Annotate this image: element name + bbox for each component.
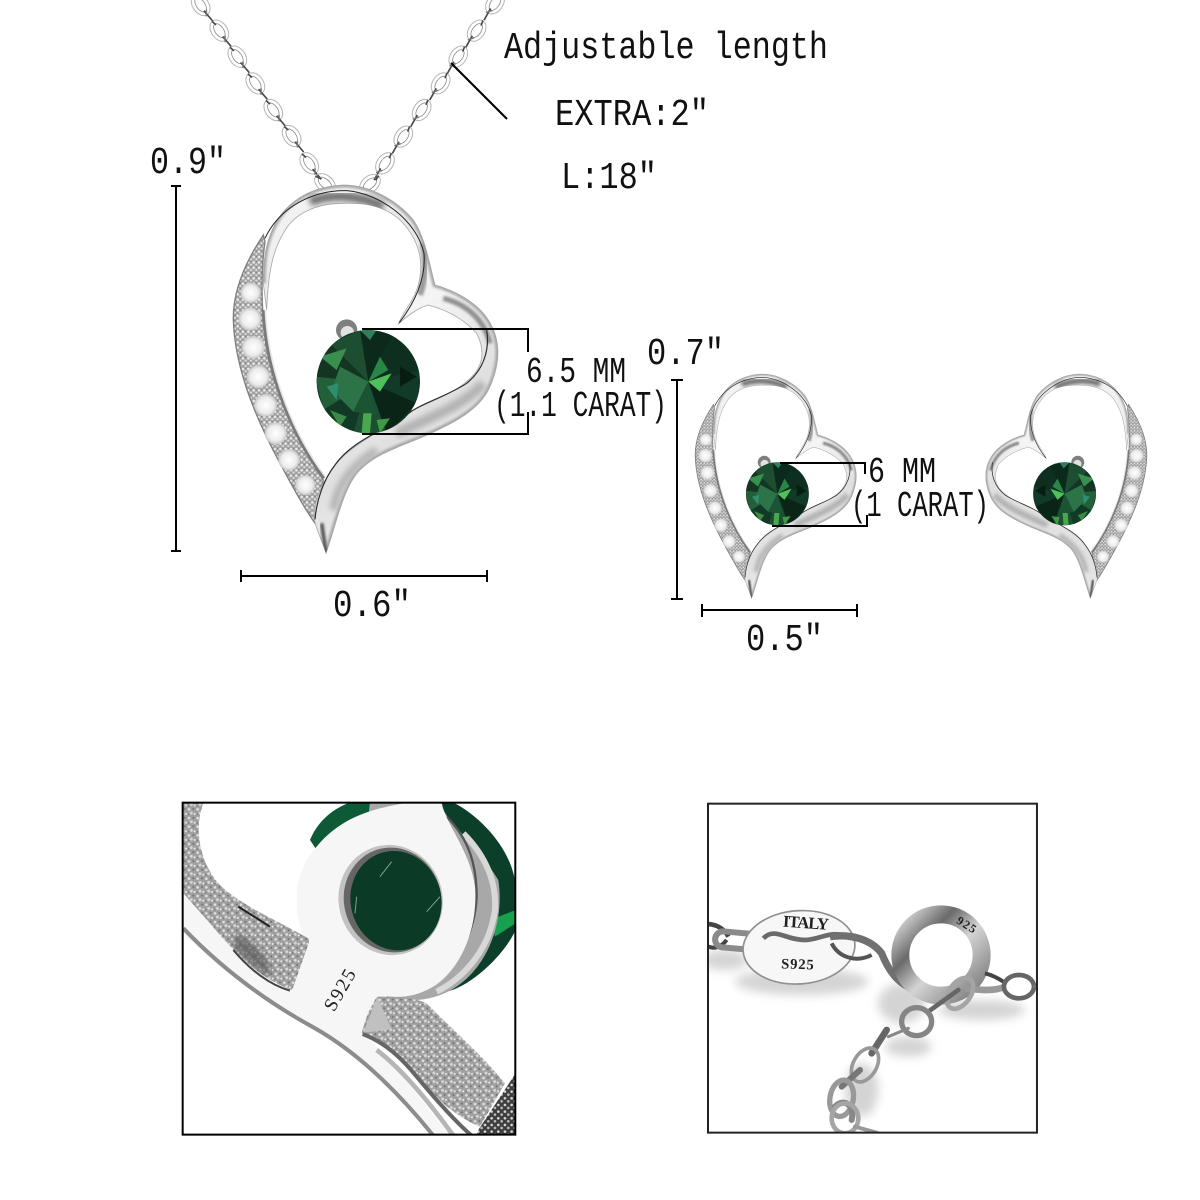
pendant stone size bracket [362,329,667,434]
label: earring width: 0.5" [746,619,823,662]
earring height dimension [647,333,724,599]
textured band upper left [183,803,309,990]
panel border [708,804,1037,1133]
label: earring height: 0.7" [647,333,724,376]
label: pendant height: 0.9" [150,142,226,185]
earring width dimension [702,604,857,662]
soft shadows [702,950,1025,1117]
label: earring stone carat: (1 CARAT) [851,486,989,527]
panel: S925 pendant back close-up [182,802,516,1136]
label: chain length: L:18" [561,157,657,200]
label: stone carat: (1.1 CARAT) [494,386,667,427]
textured band lower right [362,997,505,1136]
pave corner [477,1073,516,1136]
polished silver ribbon [263,185,498,553]
round setting [297,802,500,1000]
polished band [183,893,450,1136]
hanging chain links [827,973,979,1133]
pendant width dimension [241,570,487,628]
necklace chain [187,0,508,203]
label: adjustable length: Adjustable length [504,27,828,70]
spring ring clasp [900,913,982,996]
label: earring stone millimetres: 6 MM [868,452,936,493]
pendant height dimension [150,142,226,551]
pave band with small diamonds [233,235,325,523]
earring stone size bracket [772,452,989,527]
left chain links [709,922,750,952]
panel border [183,803,515,1135]
hallmark S925: S925 [320,966,361,1015]
right chain links [965,973,1038,998]
oval ITALY tag: ITALY [782,912,830,934]
label: stone millimetres: 6.5 MM [526,352,626,393]
spring ring clasp: 925 [954,913,979,936]
green round gemstone [313,327,423,437]
label: pendant width: 0.6" [333,585,411,628]
connector to clasp [830,932,906,990]
leader line to chain [451,63,507,119]
stone back opening [338,844,443,956]
left earring [695,374,856,598]
oval ITALY tag: S925 [781,956,814,973]
oval ITALY tag [741,907,857,988]
prong [336,319,357,341]
panel: clasp close-up with ITALY S925 tag [702,803,1038,1133]
necklace heart pendant with green stone [233,185,498,553]
label: extra length: EXTRA:2" [555,94,709,137]
right earring [986,374,1147,598]
green stone slivers behind setting [310,802,516,992]
